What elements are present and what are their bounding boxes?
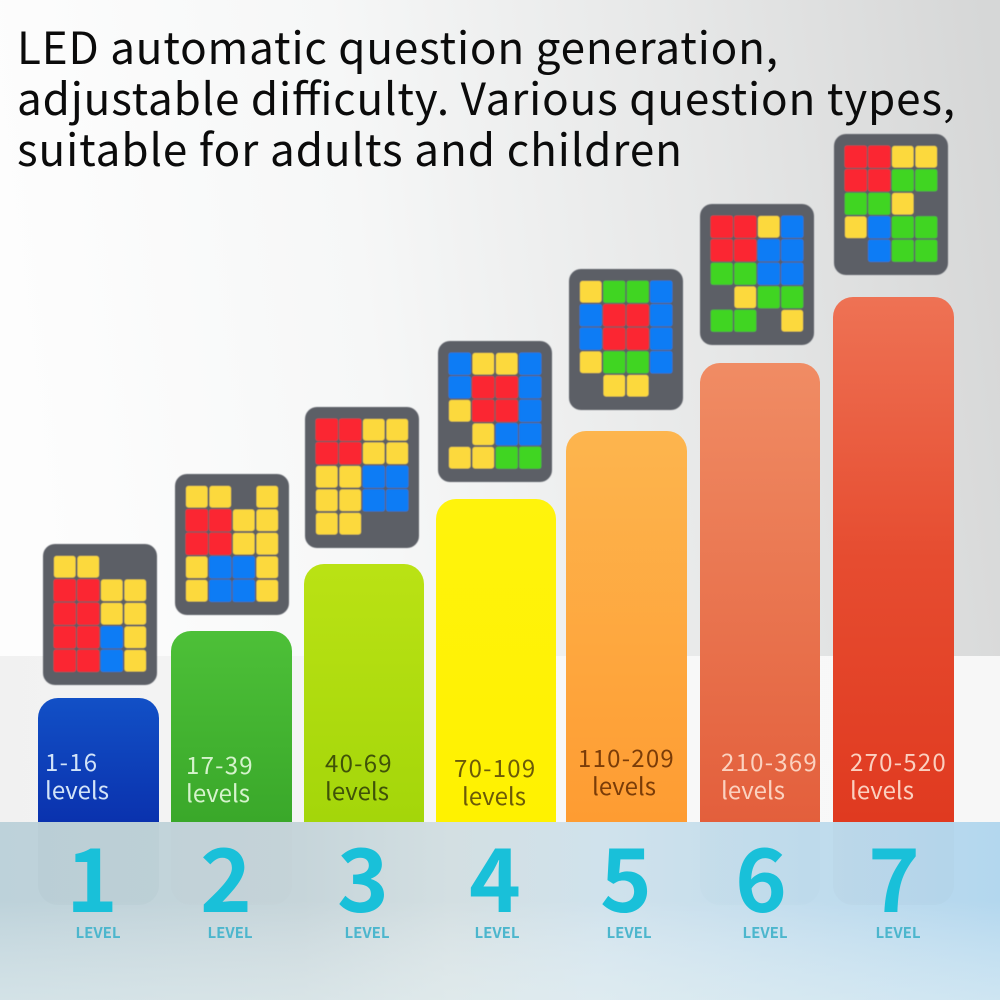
number 1: 1: [66, 811, 118, 938]
puzzle grid icons: [43, 134, 948, 685]
caption 7: LEVEL: [875, 922, 921, 943]
icon: grid level 6: [700, 204, 814, 345]
icon: grid level 3: [305, 407, 419, 548]
icon: grid level 1: [43, 544, 157, 685]
title: adjustable difficulty. Various question types,: [17, 64, 955, 128]
title: suitable for adults and children: [17, 115, 682, 179]
title: [17, 13, 955, 179]
label: 40-69 levels: 40-69: [325, 744, 393, 779]
label: 210-369 levels: levels: [721, 771, 785, 806]
label: 70-109 levels: levels: [462, 777, 526, 812]
bar 5: [566, 431, 687, 822]
number 7: 7: [868, 811, 920, 938]
label: 270-520 levels: 270-520: [850, 743, 947, 778]
label: 1-16 levels: levels: [45, 771, 109, 806]
label: 210-369 levels: 210-369: [721, 743, 818, 778]
background wall: [0, 0, 1000, 656]
range labels on bars: [45, 739, 947, 812]
bar chart: seven rising level bars: [38, 297, 954, 822]
bar 2: [171, 631, 292, 822]
caption 5: LEVEL: [606, 922, 652, 943]
caption 1: LEVEL: [75, 922, 121, 943]
bar 3: [304, 564, 424, 822]
number 6: 6: [735, 811, 787, 938]
number 2: 2: [200, 811, 252, 938]
number 3: 3: [337, 811, 389, 938]
bar 1: [38, 698, 159, 822]
label: 1-16 levels: 1-16: [45, 743, 98, 778]
number 4: 4: [469, 811, 521, 938]
caption 6: LEVEL: [742, 922, 788, 943]
title: LED automatic question generation,: [17, 13, 778, 77]
bar 4: [436, 499, 556, 822]
label: 110-209 levels: levels: [592, 767, 656, 802]
caption 2: LEVEL: [207, 922, 253, 943]
label: 17-39 levels: levels: [186, 774, 250, 809]
bar 6: [700, 363, 820, 822]
label: 40-69 levels: levels: [325, 772, 389, 807]
bar 7: [833, 297, 954, 822]
background floor: [0, 656, 1000, 826]
lower band panel with level numbers: [0, 811, 1000, 1000]
caption 4: LEVEL: [474, 922, 520, 943]
icon: grid level 7: [834, 134, 948, 275]
label: 110-209 levels: 110-209: [578, 739, 675, 774]
label: 17-39 levels: 17-39: [186, 746, 254, 781]
caption 3: LEVEL: [344, 922, 390, 943]
number 5: 5: [600, 811, 652, 938]
icon: grid level 4: [438, 341, 552, 482]
label: 70-109 levels: 70-109: [454, 749, 536, 784]
label: 270-520 levels: levels: [850, 771, 914, 806]
icon: grid level 5: [569, 269, 683, 410]
icon: grid level 2: [175, 474, 289, 615]
